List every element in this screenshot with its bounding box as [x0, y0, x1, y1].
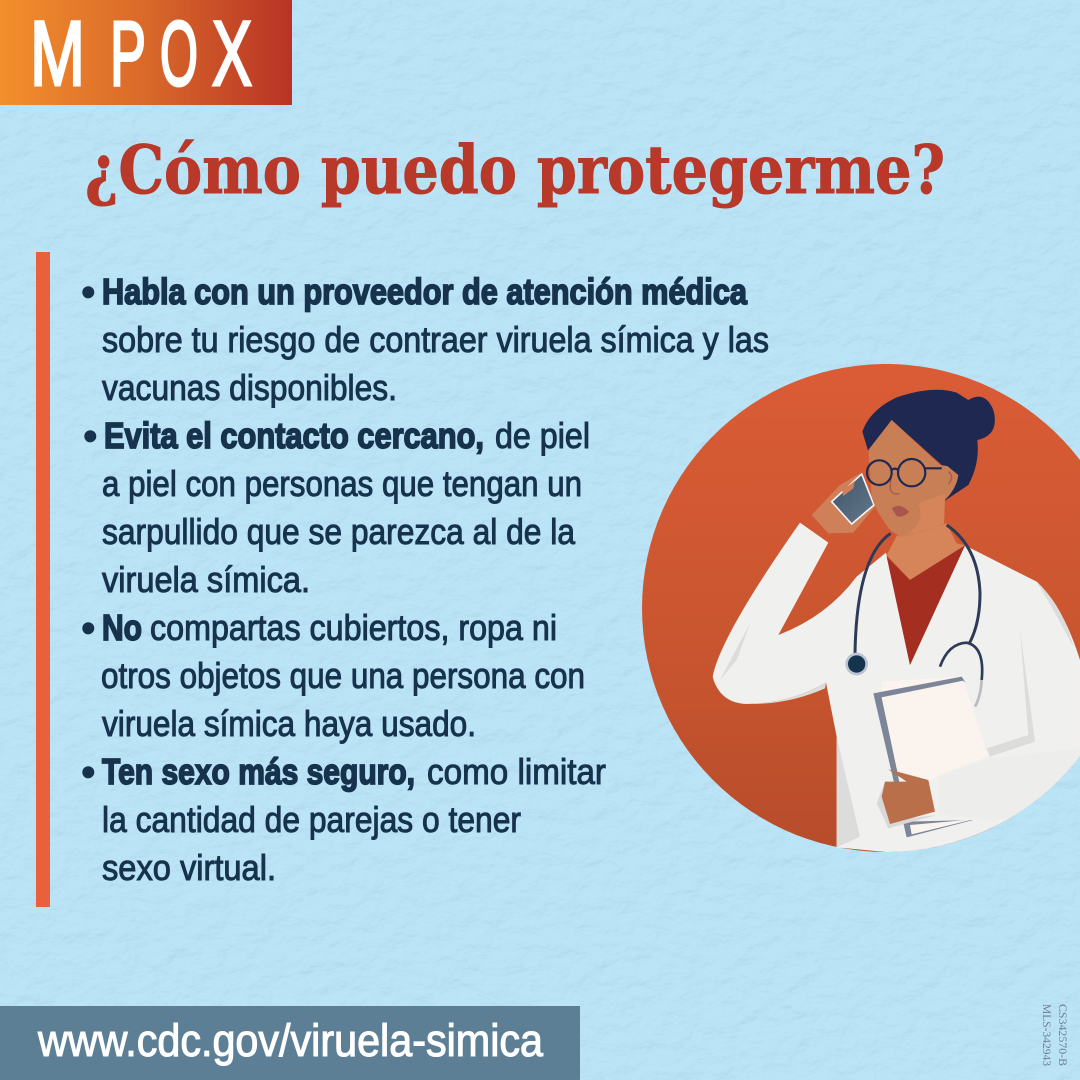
- bullet list: [82, 271, 769, 888]
- right sleeve: [938, 748, 1080, 822]
- bullet 3: do not share objects: [82, 607, 585, 744]
- bullet 3: do not share objects: compartas cubiertos, ropa ni: [150, 607, 557, 648]
- bullet 4: safer sex: la cantidad de parejas o tener: [102, 799, 521, 840]
- bullet 3: do not share objects: viruela símica haya usado.: [102, 703, 476, 744]
- bullet 4: safer sex: como limitar: [427, 751, 606, 792]
- bullet 2: avoid close contact: de piel: [495, 415, 590, 456]
- bullet 2: avoid close contact: viruela símica.: [102, 559, 310, 600]
- header banner: MPOX: X: [212, 3, 252, 105]
- stethoscope: [845, 525, 982, 707]
- header banner: MPOX: [0, 0, 292, 105]
- bullet 1: talk to a provider: Habla con un proveedor de atención médica: [102, 271, 748, 312]
- lab coat: [713, 523, 1080, 852]
- ear: [948, 472, 952, 484]
- bullet 4: safer sex: [82, 751, 606, 888]
- phone: [832, 474, 874, 524]
- bullet 3: do not share objects: otros objetos que una persona con: [101, 655, 585, 696]
- scrub top: [887, 545, 965, 665]
- bullet 4: safer sex: •: [82, 751, 95, 792]
- header banner: MPOX: O: [160, 3, 198, 105]
- footer url bar: [0, 1006, 580, 1080]
- coat shading: [713, 582, 1073, 847]
- header banner: MPOX: M: [30, 3, 85, 105]
- bullet 2: avoid close contact: Evita el contacto cercano,: [104, 415, 484, 456]
- bullet 2: avoid close contact: •: [84, 415, 97, 456]
- hand holding clipboard: [877, 769, 937, 828]
- bullet 2: avoid close contact: sarpullido que se parezca al de la: [102, 511, 576, 552]
- title: ¿Cómo puedo protegerme?: [85, 131, 945, 209]
- document codes: CS342570-B: [1056, 1004, 1070, 1066]
- bullet 1: talk to a provider: sobre tu riesgo de contraer viruela símica y las: [102, 319, 769, 360]
- bullet 1: talk to a provider: [82, 271, 769, 408]
- accent bar: [36, 252, 50, 907]
- bullet 2: avoid close contact: [84, 415, 590, 600]
- bullet 3: do not share objects: •: [82, 607, 95, 648]
- glasses: [867, 459, 942, 486]
- document codes: MLS-342943: [1040, 1004, 1054, 1066]
- hand holding phone: [812, 473, 875, 533]
- nose and mouth: [890, 472, 909, 517]
- orange circle: [642, 364, 1080, 852]
- bullet 3: do not share objects: No: [102, 607, 142, 648]
- bullet 4: safer sex: sexo virtual.: [102, 847, 276, 888]
- bullet 2: avoid close contact: a piel con personas que tengan un: [102, 463, 582, 504]
- cheek highlight: [903, 493, 945, 536]
- hair and bun: [862, 390, 995, 501]
- header banner: MPOX: P: [110, 3, 146, 105]
- bullet 4: safer sex: Ten sexo más seguro,: [102, 751, 415, 792]
- bullet 1: talk to a provider: •: [82, 271, 95, 312]
- neck: [887, 523, 965, 580]
- clipboard: [873, 677, 988, 837]
- face: [868, 420, 958, 537]
- document codes: [1040, 1004, 1070, 1066]
- footer url bar: www.cdc.gov/viruela-simica: [37, 1015, 544, 1066]
- illustration: doctor on phone in orange circle: [642, 364, 1080, 852]
- bullet 1: talk to a provider: vacunas disponibles.: [102, 367, 397, 408]
